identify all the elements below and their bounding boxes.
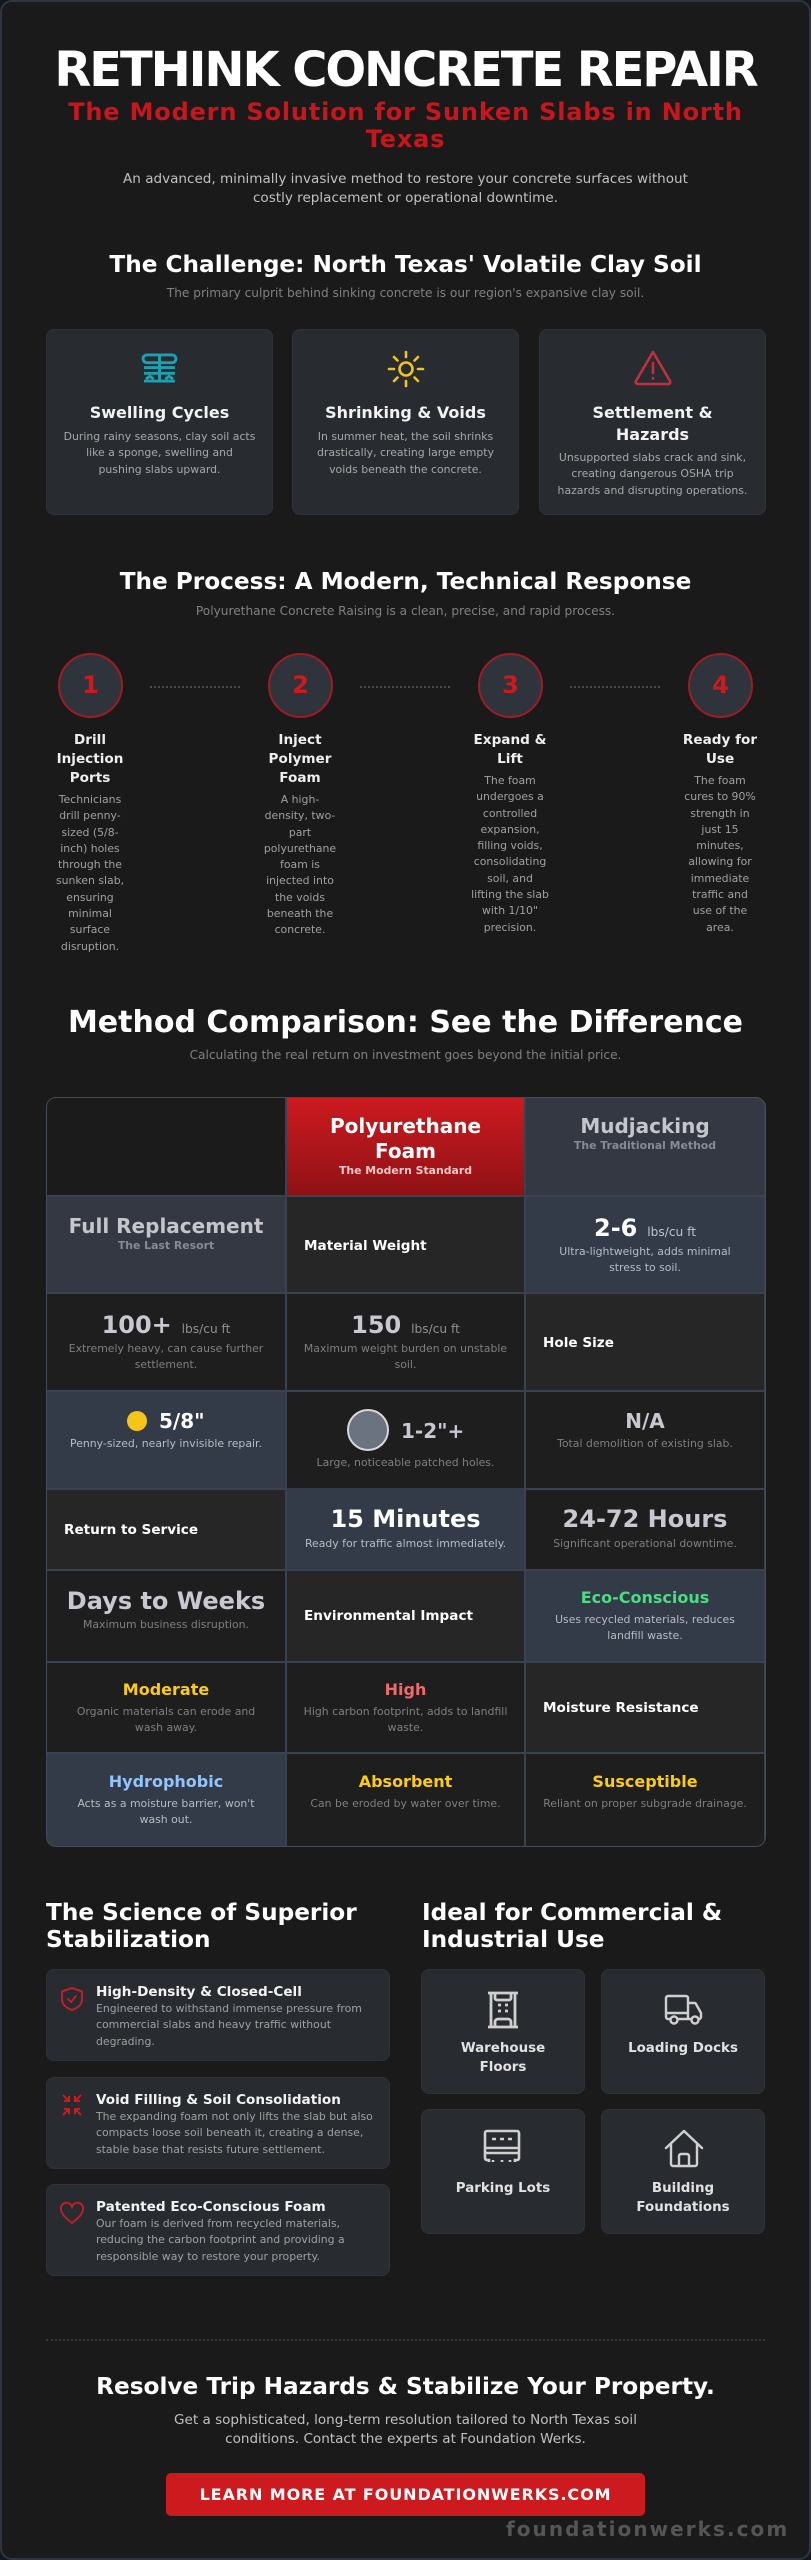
step text: area. (706, 921, 734, 934)
card title: Hazards (616, 424, 689, 444)
value: 15 Minutes (330, 1505, 481, 1533)
label: Material Weight (304, 1238, 427, 1254)
large hole circle (347, 1409, 389, 1451)
row label: material weight (287, 1197, 524, 1292)
heading: Method Comparison: See the Difference (68, 1005, 743, 1040)
number badge: 1 (82, 671, 99, 699)
step text: surface (70, 923, 110, 936)
value: Moderate (123, 1680, 209, 1699)
subtitle: The Modern Solution for Sunken Slabs in North (68, 98, 743, 126)
step title: Expand & (474, 732, 546, 748)
step title (269, 732, 332, 786)
mudjacking hole size (287, 1392, 524, 1488)
panel: building foundations (601, 2109, 765, 2234)
process connector 1 (150, 686, 240, 688)
heading: ideal use (422, 1899, 722, 1953)
step text (56, 793, 124, 953)
cta text: conditions. Contact the experts at Foundation Werks. (225, 2431, 586, 2447)
replacement weight (287, 1294, 524, 1390)
note: settlement. (135, 1358, 197, 1371)
value: Days to Weeks (67, 1587, 265, 1615)
step title (474, 732, 546, 767)
icon: warehouse (487, 1992, 519, 2028)
item text: The expanding foam not only lifts the slab but also (96, 2110, 373, 2123)
row label: hole size (526, 1294, 764, 1390)
note: Large, noticeable patched holes. (317, 1456, 494, 1469)
panel: eco foam (46, 2184, 390, 2276)
item text (96, 2216, 345, 2265)
replacement return to service (47, 1571, 285, 1661)
label: Environmental Impact (304, 1608, 473, 1624)
note (304, 1342, 507, 1371)
step title: Ready for (683, 732, 757, 748)
note: landfill waste. (607, 1629, 683, 1642)
process connector 3 (570, 686, 660, 688)
note (69, 1342, 264, 1371)
step text: beneath the (267, 907, 333, 920)
label (602, 2179, 764, 2217)
card title: Settlement & (592, 403, 713, 422)
step text (684, 774, 756, 934)
step 3 (471, 653, 549, 934)
section heading: method comparison (68, 1005, 743, 1062)
heading: ideal use: Ideal for Commercial & (422, 1899, 722, 1926)
replacement environmental impact (287, 1663, 524, 1752)
step text: undergoes a (476, 790, 544, 803)
step text: density, two- (265, 809, 335, 822)
step text: Technicians (59, 793, 121, 806)
panel: warehouse floors (421, 1969, 585, 2094)
label: Floors (480, 2060, 526, 2075)
tagline: The Traditional Method (574, 1139, 716, 1152)
heading: The Challenge: North Texas' Volatile Clay Soil (109, 251, 702, 278)
section heading: the challenge (109, 251, 702, 300)
tagline: The Last Resort (118, 1239, 214, 1252)
item text: reducing the carbon footprint and providing a (96, 2233, 345, 2246)
step text: through the (58, 858, 122, 871)
step 2 (264, 653, 336, 936)
step text: The foam (694, 774, 746, 787)
step title: Ports (70, 770, 110, 786)
empty header cell (47, 1098, 285, 1195)
header (54, 42, 758, 206)
value: Hydrophobic (109, 1772, 223, 1791)
item title: Void Filling & Soil Consolidation (96, 2092, 341, 2108)
panel: shrinking and voids (292, 329, 519, 515)
step text: A high- (281, 793, 319, 806)
label: Loading Docks (628, 2041, 738, 2056)
foam hole size (47, 1392, 285, 1488)
number badge (58, 653, 123, 718)
step title: Lift (497, 751, 523, 767)
icon: sun (388, 350, 424, 388)
subheading: Polyurethane Concrete Raising is a clean, precise, and rapid process. (196, 604, 615, 618)
penny dot (127, 1411, 147, 1431)
step text: strength in (690, 807, 750, 820)
step text: with 1/10" (482, 904, 538, 917)
note: Maximum weight burden on unstable (304, 1342, 507, 1355)
card text (317, 430, 494, 476)
label: Building (652, 2181, 714, 2196)
replacement hole size (526, 1392, 764, 1488)
step text: drill penny- (59, 809, 121, 822)
panel: high density (46, 1969, 390, 2061)
step text: just 15 (701, 823, 739, 836)
note: Penny-sized, nearly invisible repair. (70, 1437, 262, 1450)
step title: Injection (57, 751, 123, 767)
watermark: foundationwerks.com (506, 2517, 789, 2541)
note: Total demolition of existing slab. (557, 1437, 733, 1450)
step title: Use (706, 751, 734, 767)
step title: Drill (74, 732, 106, 748)
icon: warning triangle (634, 350, 672, 386)
foam weight (526, 1197, 764, 1292)
cta heading: Resolve Trip Hazards & Stabilize Your Property. (96, 2373, 715, 2400)
row label: environmental impact (287, 1571, 524, 1661)
step text: use of the (693, 904, 747, 917)
foam moisture resistance (47, 1754, 285, 1846)
process connector 2 (360, 686, 450, 688)
card text: like a sponge, swelling and (86, 446, 233, 459)
item text: commercial slabs and heavy traffic without (96, 2018, 331, 2031)
name: Mudjacking (580, 1114, 710, 1138)
note: wash away. (135, 1721, 197, 1734)
item text (96, 2002, 362, 2048)
item text: degrading. (96, 2035, 155, 2048)
intro text: costly replacement or operational downtime. (253, 190, 558, 206)
step text: foam is (280, 858, 320, 871)
note: stress to soil. (609, 1261, 681, 1274)
card text: In summer heat, the soil shrinks (318, 430, 493, 443)
step text: precision. (484, 921, 536, 934)
title: RETHINK CONCRETE REPAIR (54, 42, 757, 98)
panel: void filling (46, 2077, 390, 2169)
step text: minimal (68, 907, 112, 920)
icon: swelling soil (142, 354, 178, 382)
note: waste. (388, 1721, 423, 1734)
step 1 (56, 653, 124, 953)
name: Foam (375, 1138, 436, 1162)
value: High (385, 1680, 426, 1699)
step text: soil, and (487, 872, 533, 885)
cta text (0, 2411, 811, 2449)
intro text (123, 171, 688, 206)
step text: inch) holes (60, 842, 120, 855)
item title: High-Density & Closed-Cell (96, 1984, 302, 2000)
item title: Patented Eco-Conscious Foam (96, 2199, 326, 2215)
row label: return to service (47, 1490, 285, 1569)
card text (558, 451, 747, 497)
step text: injected into (266, 874, 334, 887)
card text: hazards and disrupting operations. (558, 484, 747, 497)
heading: science of stabilization (46, 1899, 357, 1953)
header: polyurethane foam (287, 1098, 524, 1195)
subheading: The primary culprit behind sinking concrete is our region's expansive clay soil. (167, 286, 644, 300)
name (330, 1114, 481, 1162)
note: Acts as a moisture barrier, won't (77, 1797, 255, 1810)
step text: minutes, (696, 839, 744, 852)
card title: Shrinking & Voids (325, 403, 486, 422)
label: Foundations (636, 2200, 730, 2215)
number badge: 2 (292, 671, 309, 699)
intro text: An advanced, minimally invasive method to restore your concrete surfaces without (123, 171, 688, 187)
step text: cures to 90% (684, 790, 756, 803)
label: Hole Size (543, 1335, 614, 1351)
icon: truck (665, 1995, 703, 2025)
value: 150 lbs/cu ft (351, 1311, 460, 1339)
item text: Engineered to withstand immense pressure from (96, 2002, 362, 2015)
mudjacking moisture resistance (287, 1754, 524, 1846)
card text: voids beneath the concrete. (329, 463, 482, 476)
note: High carbon footprint, adds to landfill (304, 1704, 507, 1718)
icon: house (665, 2130, 703, 2167)
step text: polyurethane (264, 842, 336, 855)
heading: ideal use: Industrial Use (422, 1926, 605, 1953)
item text (96, 2109, 373, 2158)
step text: filling voids, (477, 839, 543, 852)
note: soil. (395, 1358, 416, 1371)
value: N/A (625, 1409, 665, 1433)
number badge (688, 653, 753, 718)
value: 100+ lbs/cu ft (102, 1311, 230, 1339)
note: Organic materials can erode and (77, 1704, 255, 1718)
note (559, 1245, 731, 1274)
section heading: the process (120, 568, 691, 618)
foam return to service (287, 1488, 524, 1569)
step text: ensuring (66, 891, 114, 904)
value: Absorbent (359, 1772, 452, 1791)
icon: compress arrows (61, 2094, 83, 2116)
step text: lifting the slab (471, 888, 549, 901)
note: Significant operational downtime. (553, 1537, 737, 1550)
cta button: LEARN MORE AT FOUNDATIONWERKS.COM (200, 2485, 611, 2504)
panel: settlement and hazards (539, 329, 766, 515)
heading: science of stabilization: Stabilization (46, 1926, 210, 1953)
value: Eco-Conscious (581, 1588, 709, 1607)
step text: sized (5/8- (61, 826, 119, 839)
step text (264, 793, 336, 936)
step title: Inject (278, 732, 322, 748)
number badge (268, 653, 333, 718)
step text: part (289, 826, 311, 839)
card text: creating dangerous OSHA trip (571, 467, 734, 480)
note: Uses recycled materials, reduces (555, 1613, 735, 1626)
call to action (0, 2370, 811, 2515)
step text: the voids (275, 891, 325, 904)
note (77, 1797, 255, 1826)
mudjacking return to service (526, 1490, 764, 1569)
step text: traffic and (692, 888, 748, 901)
value: 1-2"+ (401, 1419, 464, 1443)
number badge: 3 (502, 671, 519, 699)
item text: compacts loose soil beneath it, creating a dense, (96, 2126, 363, 2139)
step title (683, 732, 758, 767)
step 4 (683, 653, 758, 934)
label: Warehouse (461, 2041, 545, 2056)
comparison table (46, 1097, 766, 1847)
step text: allowing for (688, 855, 752, 868)
panel: loading docks (601, 1969, 765, 2094)
note: wash out. (140, 1813, 192, 1826)
note: Maximum business disruption. (83, 1618, 249, 1631)
subheading: Calculating the real return on investment goes beyond the initial price. (190, 1048, 621, 1062)
cta button (166, 2473, 645, 2516)
number badge (478, 653, 543, 718)
heading: The Process: A Modern, Technical Response (120, 568, 691, 595)
header: full replacement (47, 1197, 285, 1292)
tagline: The Modern Standard (339, 1164, 472, 1177)
note: Can be eroded by water over time. (310, 1797, 501, 1810)
note: Extremely heavy, can cause further (69, 1342, 263, 1355)
card text: Unsupported slabs crack and sink, (559, 451, 746, 464)
note (555, 1613, 735, 1642)
header: mudjacking (526, 1098, 764, 1195)
note (304, 1704, 507, 1734)
card text: pushing slabs upward. (98, 463, 220, 476)
step text: controlled (483, 807, 537, 820)
item text: Our foam is derived from recycled materials, (96, 2217, 340, 2230)
foam environmental impact (526, 1571, 764, 1661)
note: Reliant on proper subgrade drainage. (543, 1797, 747, 1810)
label (422, 2039, 584, 2077)
mudjacking environmental impact (47, 1663, 285, 1752)
item text: stable base that resists future settlement. (96, 2143, 325, 2156)
step text: The foam (484, 774, 536, 787)
item text: responsible way to restore your property. (96, 2250, 320, 2263)
icon: shield (61, 1987, 83, 2011)
card text: drastically, creating large empty (317, 446, 494, 459)
heading: science of stabilization: The Science of Superior (46, 1899, 357, 1926)
replacement moisture resistance (526, 1754, 764, 1846)
step text: expansion, (480, 823, 540, 836)
name: Polyurethane (330, 1114, 481, 1138)
step text: consolidating (474, 855, 546, 868)
label: Return to Service (64, 1522, 198, 1538)
value: Susceptible (592, 1772, 698, 1791)
row label: moisture resistance (526, 1663, 764, 1752)
note (77, 1704, 255, 1734)
label: Moisture Resistance (543, 1700, 699, 1716)
step title (57, 732, 123, 786)
name: Full Replacement (69, 1214, 263, 1238)
note: Ready for traffic almost immediately. (305, 1537, 506, 1550)
value: 5/8" (159, 1409, 205, 1433)
mudjacking weight (47, 1294, 285, 1390)
subtitle: Texas (366, 125, 445, 153)
step text: disruption. (61, 940, 119, 953)
icon: parking structure (484, 2130, 520, 2163)
step title: Foam (279, 770, 321, 786)
step text: immediate (691, 872, 749, 885)
number badge: 4 (712, 671, 729, 699)
card title: Swelling Cycles (90, 403, 229, 422)
subtitle (68, 98, 743, 153)
icon: heart (60, 2202, 84, 2224)
step text (471, 774, 549, 934)
step title: Polymer (269, 751, 331, 767)
panel: swelling cycles (46, 329, 273, 515)
card title (592, 403, 713, 444)
panel: parking lots (421, 2109, 585, 2234)
value: 24-72 Hours (563, 1505, 727, 1533)
step text: sunken slab, (56, 874, 124, 887)
note: Ultra-lightweight, adds minimal (559, 1245, 731, 1258)
value: 2-6 lbs/cu ft (594, 1214, 696, 1242)
step text: concrete. (275, 923, 325, 936)
label: Parking Lots (456, 2181, 550, 2196)
card text: During rainy seasons, clay soil acts (64, 430, 255, 443)
card text (64, 430, 255, 476)
cta text: Get a sophisticated, long-term resolution tailored to North Texas soil (174, 2412, 637, 2428)
